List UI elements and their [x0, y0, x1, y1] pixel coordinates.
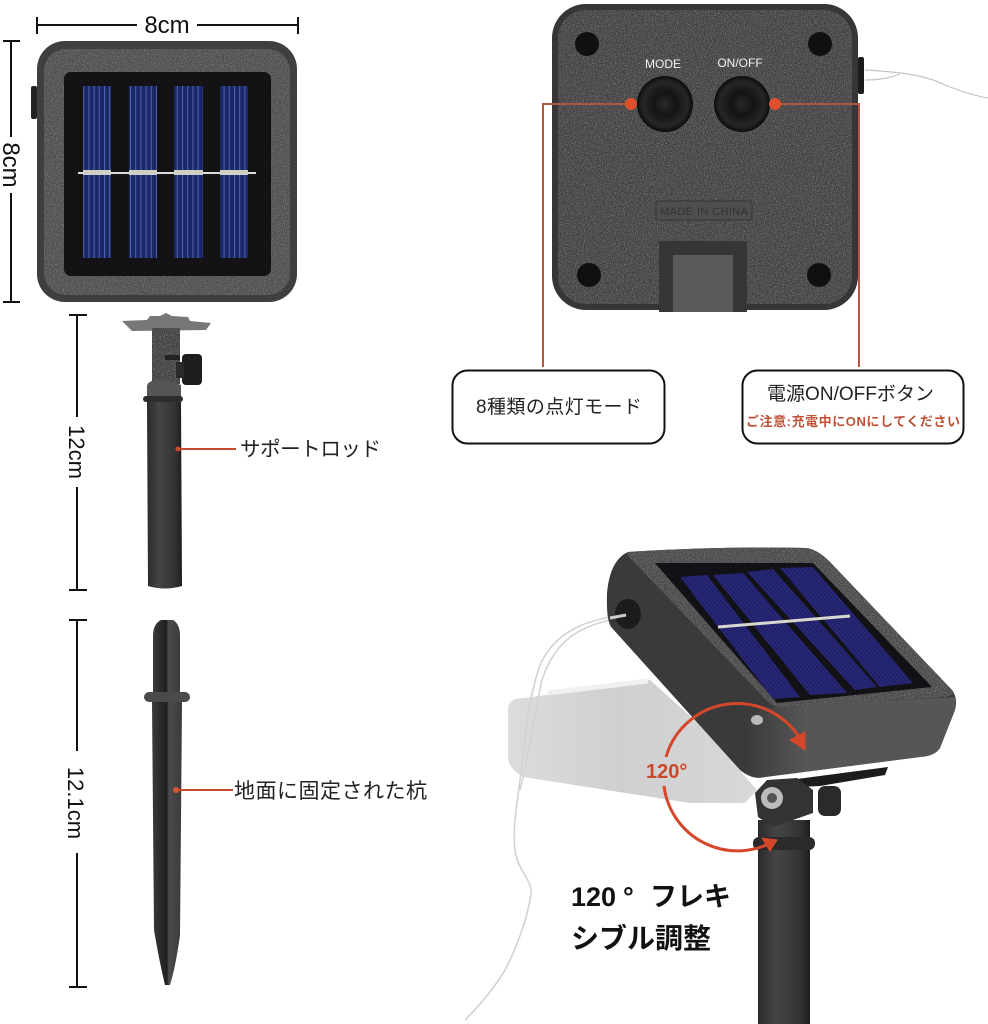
cable grommet: [610, 599, 641, 629]
top rim: [628, 548, 953, 707]
solar surface: [655, 563, 932, 703]
silhouette and side face: [607, 548, 956, 778]
dimension: support rod 12cm: 12cm: [64, 425, 89, 479]
solar cells: [83, 86, 248, 258]
callout: support rod: サポートロッド: [240, 438, 381, 461]
solar panel front view: [31, 41, 297, 302]
label box: power on/off button: 電源ON/OFFボタン: [767, 383, 934, 405]
corner highlight: [751, 715, 763, 725]
tilt arc arrows: [664, 703, 805, 851]
dimension: top width 8cm: [37, 12, 298, 39]
heading: 120 degree flexible adjustment: 120: [571, 882, 616, 912]
dimension: top width 8cm: 8cm: [144, 12, 190, 39]
label box: power on/off button: ご注意:充電中にONにしてください: [746, 414, 960, 429]
ON/OFF button: [714, 56, 770, 132]
MODE button: [637, 57, 693, 132]
tilt angle label: 120°: [646, 761, 687, 783]
dimension: stake 12.1cm: [63, 620, 88, 987]
wire from back panel: [865, 70, 988, 98]
heading: 120 degree flexible adjustment: [571, 882, 731, 954]
connector: on/off button to label: [769, 98, 859, 367]
support post: [753, 820, 815, 1024]
embossed made in china: [656, 201, 752, 220]
ground stake: [144, 620, 190, 985]
heading: 120 degree flexible adjustment: °: [623, 882, 634, 912]
dimension: left height 8cm: [0, 41, 24, 302]
dimension: support rod 12cm: [64, 315, 89, 590]
front face: [735, 697, 955, 778]
dimension: stake 12.1cm: 12.1cm: [63, 767, 88, 839]
heading: 120 degree flexible adjustment: シブル調整: [571, 922, 711, 954]
embossed made in china: MADE IN CHINA: [660, 206, 749, 218]
screws: [575, 32, 832, 287]
ghost panel showing tilt range: [508, 680, 757, 803]
callout: ground stake: 地面に固定された杭: [234, 780, 427, 803]
solar panel back view: [552, 4, 864, 312]
label box: 8 lighting modes: 8種類の点灯モード: [476, 396, 642, 418]
label box: power on/off button: [742, 370, 964, 444]
ON/OFF button: ON/OFF: [717, 56, 763, 70]
MODE button: MODE: [645, 57, 681, 71]
connector: mode button to label: [543, 98, 637, 367]
wire on tilted panel: [465, 615, 622, 1020]
clip slot: [659, 241, 747, 312]
callout: support rod: [176, 438, 381, 461]
heading: 120 degree flexible adjustment: フレキ: [650, 882, 731, 912]
tilted solar panel: [607, 548, 956, 778]
hinge and nut: [755, 767, 888, 827]
support rod: [122, 313, 211, 588]
label box: 8 lighting modes: [452, 370, 664, 444]
